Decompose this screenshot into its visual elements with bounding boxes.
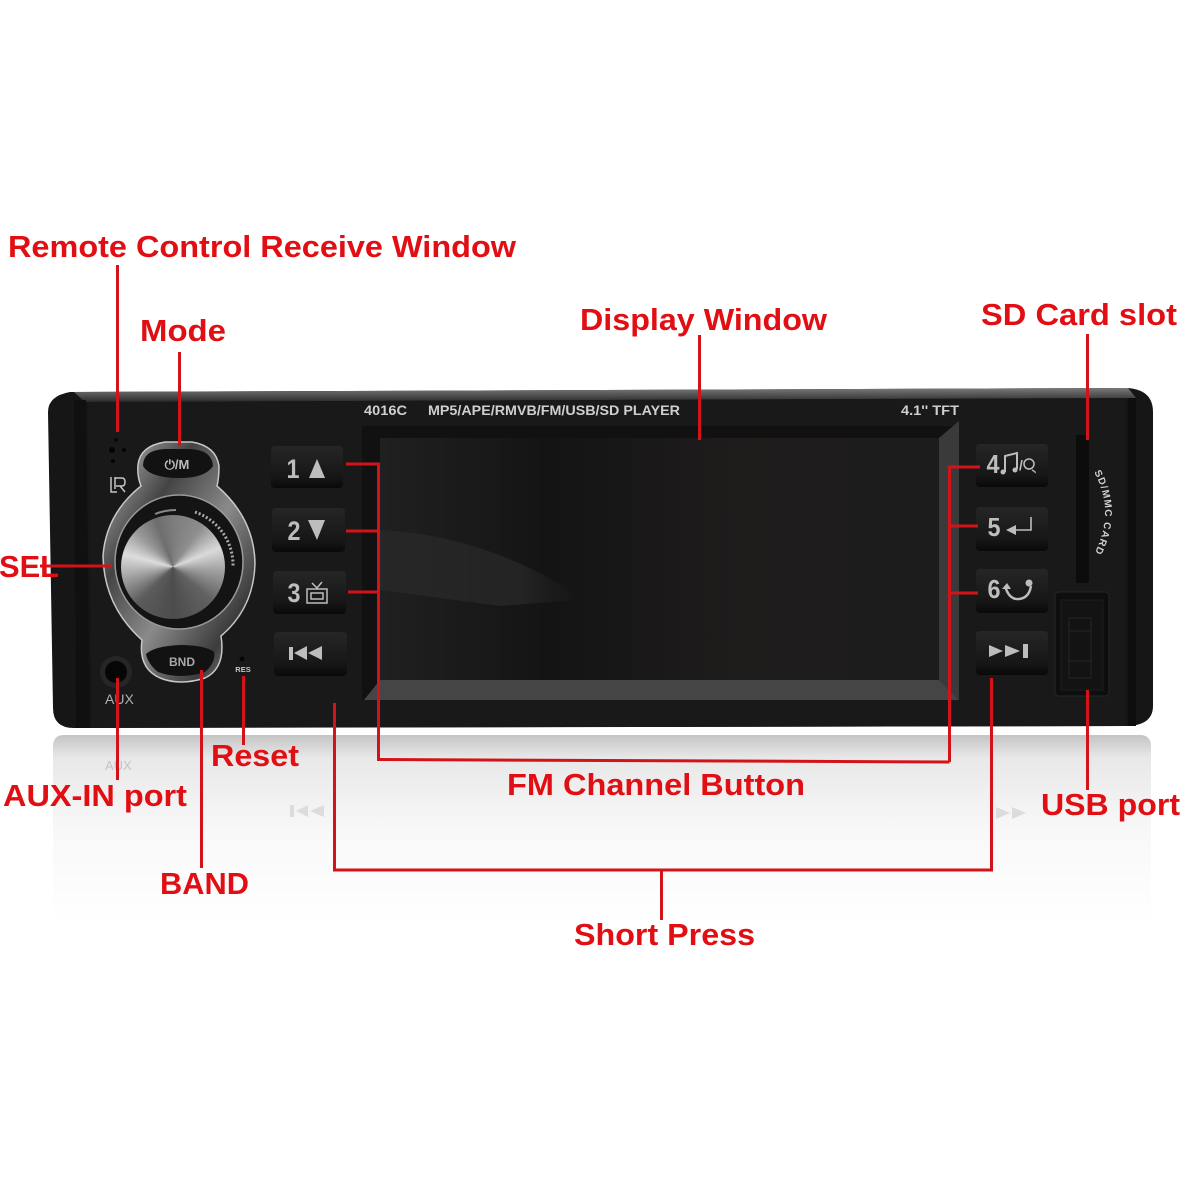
label: Remote Control Receive Window: Remote Control Receive Window: [8, 229, 517, 264]
label: SD Card slot: SD Card slot: [981, 297, 1177, 332]
label: SEL: SEL: [0, 549, 59, 584]
label: Display Window: Display Window: [580, 302, 828, 337]
right preset buttons: 6: [988, 574, 1000, 604]
printed model and title text: 4.1'' TFT: [901, 402, 959, 418]
printed model and title text: MP5/APE/RMVB/FM/USB/SD PLAYER: [428, 402, 680, 418]
SD card slot: [1076, 435, 1112, 583]
radio head unit: [48, 388, 1153, 728]
reset hole: RES: [235, 665, 251, 674]
callout lines: [40, 265, 1088, 920]
remote receive window: [109, 438, 126, 492]
printed model and title text: [364, 402, 959, 418]
bracket: FM channel left: [346, 464, 950, 762]
knob assembly: [103, 442, 255, 682]
left preset buttons: 2: [288, 516, 300, 546]
chrome surround: [103, 442, 255, 682]
line: SEL: [40, 564, 112, 568]
left preset buttons: [271, 446, 347, 676]
mode button: [143, 449, 213, 478]
label: Short Press: Short Press: [574, 917, 755, 952]
AUX jack: AUX: [105, 691, 134, 707]
line: AUX-IN: [116, 678, 119, 780]
knob assembly: BND: [169, 655, 195, 669]
right preset buttons: 5: [988, 512, 1000, 542]
left preset buttons: 1: [286, 454, 300, 484]
line: USB: [1086, 690, 1089, 790]
right preset buttons: 4: [986, 449, 1000, 479]
label: AUX-IN port: AUX-IN port: [3, 778, 187, 813]
line: reset: [242, 676, 245, 745]
right preset buttons: [976, 444, 1048, 675]
label: FM Channel Button: FM Channel Button: [507, 767, 805, 802]
line: short press stem: [660, 870, 663, 920]
label: BAND: BAND: [160, 866, 249, 901]
reflection of the radio: [53, 735, 1151, 925]
AUX jack: [100, 656, 134, 707]
line: SD card slot: [1086, 334, 1089, 440]
bracket: short press: [334, 678, 992, 870]
line: mode: [178, 352, 181, 446]
reflection of the radio: AUX: [105, 758, 132, 773]
printed model and title text: 4016C: [364, 402, 407, 418]
label: Reset: Reset: [211, 738, 299, 773]
display window: [362, 421, 959, 700]
BND button: [146, 645, 214, 676]
body: [48, 388, 1153, 728]
right preset buttons: /: [1019, 457, 1023, 473]
left preset buttons: 3: [288, 578, 300, 608]
USB port cover: [1055, 592, 1109, 696]
knob assembly: ⏻/M: [165, 457, 189, 472]
line: BAND: [200, 670, 203, 868]
label: Mode: Mode: [140, 313, 226, 348]
reset hole: [235, 656, 251, 674]
line: remote control: [116, 265, 119, 432]
bracket: FM channel right: [950, 467, 980, 762]
top bevel: [74, 388, 1136, 402]
label: USB port: USB port: [1041, 787, 1180, 822]
SD card slot: SD/MMC CARD: [1095, 470, 1112, 554]
knob face: [121, 515, 225, 619]
line: display window: [698, 335, 701, 440]
